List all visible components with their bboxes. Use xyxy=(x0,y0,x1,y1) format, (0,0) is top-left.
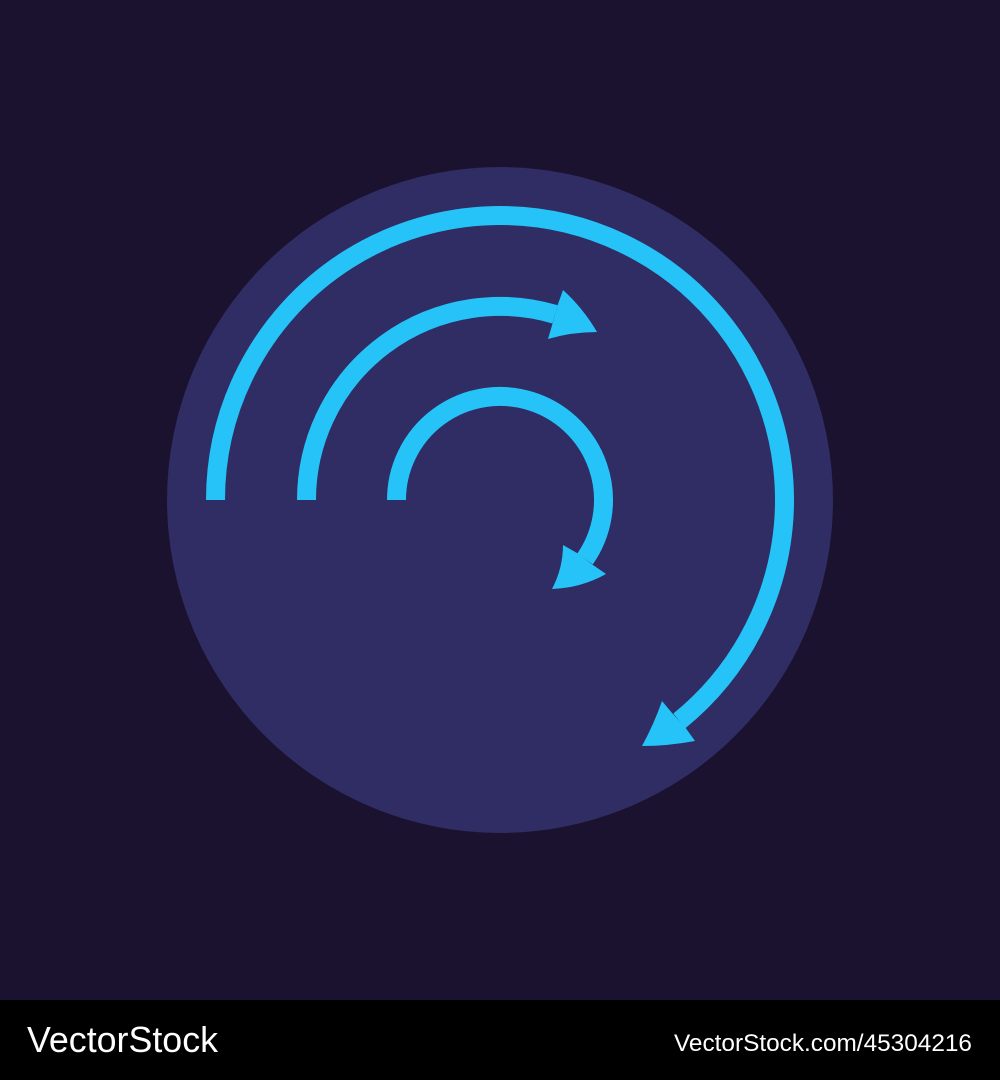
icon: inner circular arrow xyxy=(396,396,606,589)
footer bar xyxy=(0,1000,1000,1080)
icon: middle circular arrow xyxy=(306,290,597,500)
icon: outer circular arrow xyxy=(216,216,784,746)
large indigo circle xyxy=(167,167,833,833)
footer logo text: VectorStock xyxy=(27,1019,219,1060)
footer image URL text: VectorStock.com/45304216 xyxy=(674,1030,972,1057)
